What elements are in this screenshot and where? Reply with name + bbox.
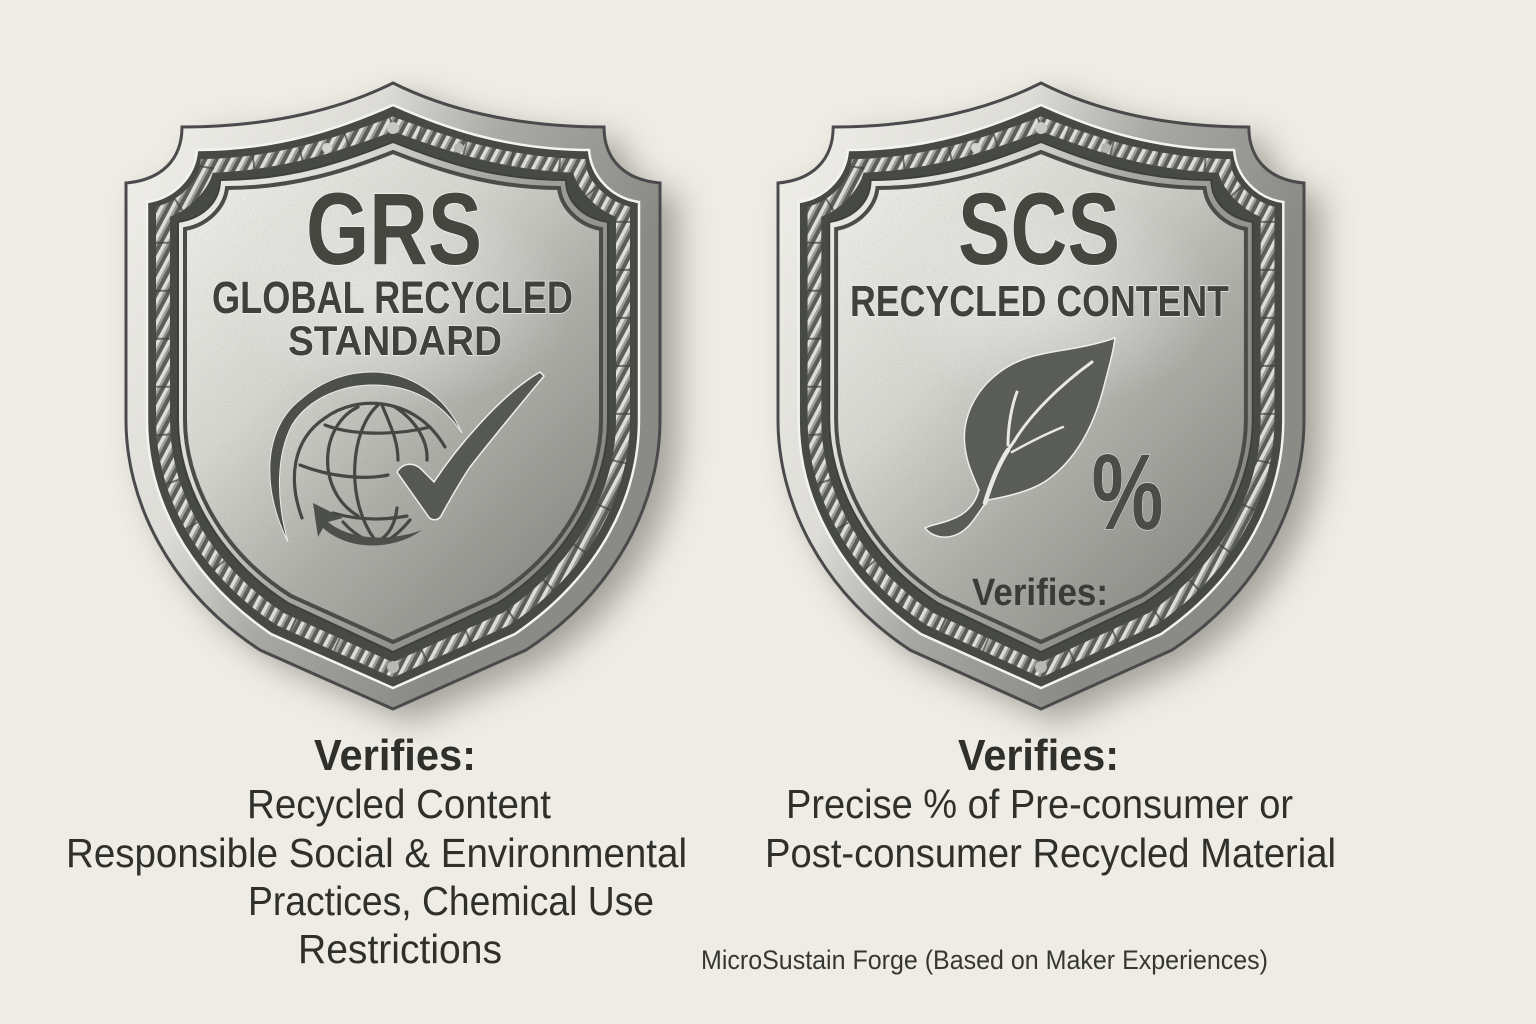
- label: Verifies: Verifies:: [314, 731, 476, 780]
- line: Post-consumer recycled material: Post-consumer Recycled Material: [765, 830, 1336, 876]
- text block: SCS verifies list: [765, 731, 1336, 876]
- shield frame: [778, 83, 1304, 709]
- icon: leaf: [925, 338, 1115, 537]
- line: Responsible Social and Environmental: Responsible Social & Environmental: [66, 830, 687, 876]
- label: Verifies: Verifies:: [958, 731, 1119, 780]
- line: Restrictions: Restrictions: [298, 926, 502, 972]
- line: Recycled Content: Recycled Content: [247, 781, 552, 827]
- shield shadow: [795, 96, 1321, 722]
- heading: GRS: GRS: [306, 172, 482, 286]
- shield frame: [126, 83, 660, 709]
- icon: percent sign: %: [1092, 431, 1164, 552]
- shield shadow: [144, 96, 678, 722]
- subheading: Recycled Content: RECYCLED CONTENT: [850, 277, 1229, 326]
- text block: GRS verifies list: [66, 731, 687, 972]
- icon: globe with check mark: [270, 372, 544, 546]
- subheading: Standard: STANDARD: [288, 317, 502, 364]
- heading: SCS: SCS: [958, 172, 1120, 286]
- source credit: MicroSustain Forge (Based on Maker Experiences): [701, 945, 1268, 975]
- line: Precise percent: Precise % of Pre-consumer or: [786, 781, 1293, 827]
- text: Verifies inside shield: Verifies:: [972, 572, 1108, 614]
- panel: GRS shield: [126, 83, 678, 722]
- subheading: Global Recycled: GLOBAL RECYCLED: [212, 272, 573, 323]
- line: Practices, Chemical Use: Practices, Chemical Use: [248, 878, 654, 924]
- panel: SCS shield: [778, 83, 1321, 722]
